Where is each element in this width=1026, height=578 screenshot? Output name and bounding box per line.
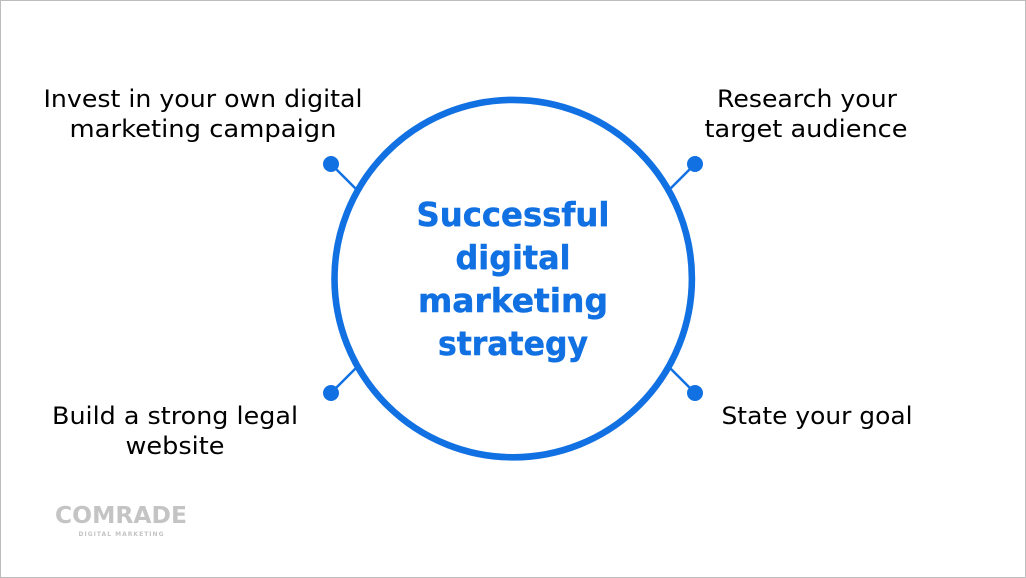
label: invest: marketing campaign — [70, 115, 336, 143]
connector: bottom right — [670, 368, 703, 401]
label: state: State your goal — [722, 402, 912, 430]
label: invest: Invest in your own digital — [44, 85, 362, 113]
logo: COMRADE — [55, 503, 187, 529]
label: build: website — [126, 432, 224, 460]
connector: bottom left — [323, 368, 356, 401]
label: build: Build a strong legal — [52, 402, 298, 430]
label: build — [52, 402, 298, 460]
center title — [416, 195, 610, 363]
label: research: target audience — [704, 115, 908, 143]
connector: top right — [670, 156, 703, 189]
logo: DIGITAL MARKETING — [78, 531, 164, 538]
connector: top left — [323, 156, 356, 189]
center title: digital — [456, 238, 570, 277]
label: research — [704, 85, 908, 143]
label: research: Research your — [717, 85, 897, 113]
center title: Successful — [416, 195, 610, 234]
central circle — [334, 100, 692, 457]
label: invest — [44, 85, 362, 143]
center title: marketing — [418, 281, 608, 320]
center title: strategy — [438, 324, 588, 363]
